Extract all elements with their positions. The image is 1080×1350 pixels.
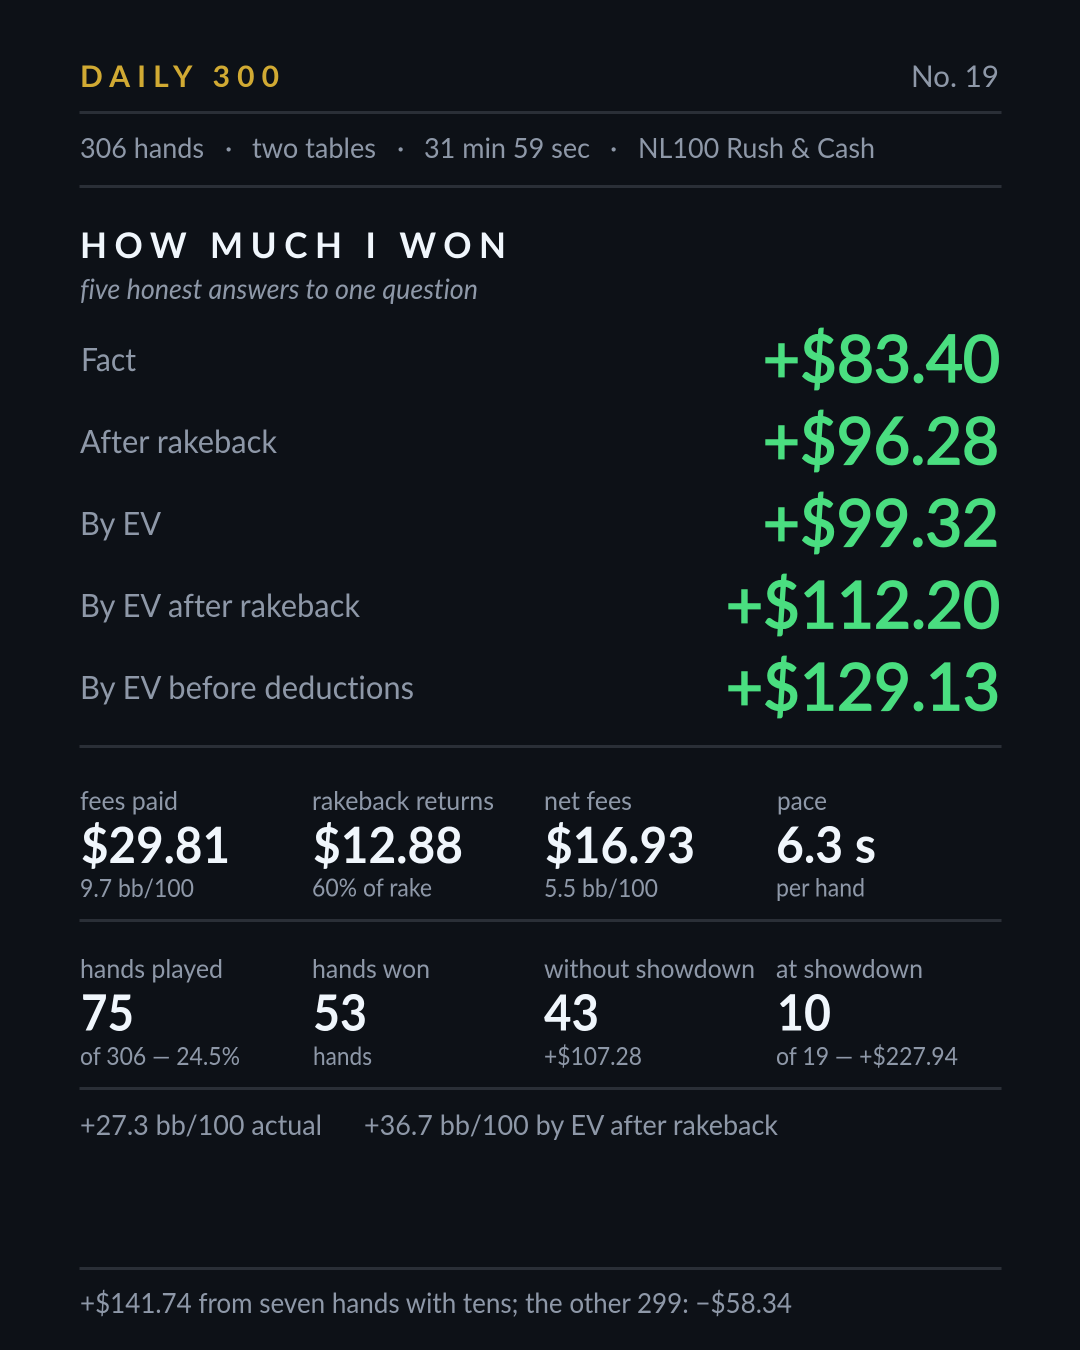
stat: hands won: 53 [313,982,367,1042]
header [80,58,999,94]
results list [80,318,1000,724]
stat: at showdown [776,952,958,1071]
result: by EV [80,482,999,560]
win rate line: +36.7 bb/100 by EV after rakeback [364,1107,779,1141]
stat: fees paid: $29.81 [81,814,230,874]
stat: hands played: of 306 — 24.5% [80,1041,240,1071]
stat: rakeback returns: rakeback returns [312,784,494,816]
stat: pace: per hand [776,872,865,902]
stat: fees paid: fees paid [80,784,178,816]
result: by EV before deductions: By EV before deductions [80,667,414,706]
result: fact [81,318,1000,396]
stat: at showdown: 10 [777,982,831,1042]
stat: fees paid: 9.7 bb/100 [80,873,194,903]
stat: at showdown: of 19 — +$227.94 [776,1041,958,1071]
result: by EV: +$99.32 [763,482,999,560]
series title: DAILY 300 [80,58,279,94]
session meta line: · [397,130,404,164]
stat: net fees: $16.93 [545,814,695,874]
session meta line: two tables [252,130,376,164]
session meta line: NL100 Rush & Cash [638,130,875,164]
stat: pace [776,784,876,902]
result: after rakeback: After rakeback [80,421,278,460]
stat: rakeback returns: 60% of rake [312,872,432,902]
stat: without showdown [544,952,755,1071]
stat: hands won: hands won [312,952,430,984]
stat: net fees: net fees [544,784,632,816]
result: after rakeback [80,400,999,478]
session meta line: · [610,130,617,164]
stat: rakeback returns: $12.88 [313,814,463,874]
stat: hands played: 75 [81,982,134,1042]
result: by EV: By EV [80,503,161,542]
result: by EV after rakeback [80,564,1000,642]
stat: without showdown: without showdown [544,952,755,984]
stat: at showdown: at showdown [776,952,923,984]
win rate line [80,1107,779,1141]
stat: hands played [80,952,240,1071]
issue number: No. 19 [911,58,999,94]
stat: rakeback returns [312,784,494,902]
stat: hands won: hands [313,1041,372,1071]
stat: without showdown: 43 [544,982,599,1042]
result: by EV after rakeback: +$112.20 [726,564,1000,642]
stats row: hands [80,952,958,1071]
stat: hands won [312,952,430,1071]
section heading [80,224,506,305]
section subtitle: five honest answers to one question [80,271,478,305]
stat: hands played: hands played [80,952,223,984]
win rate line: +27.3 bb/100 actual [80,1107,322,1141]
stats row: fees [80,784,876,903]
result: by EV before deductions [80,646,1000,724]
result: by EV before deductions: +$129.13 [726,646,1000,724]
result: after rakeback: +$96.28 [763,400,999,478]
stat: without showdown: +$107.28 [544,1041,642,1071]
session meta line: · [225,130,232,164]
stat: pace: pace [777,784,827,816]
result: by EV after rakeback: By EV after rakeback [80,585,361,624]
result: fact: Fact [81,339,136,378]
session meta line [80,130,875,164]
session meta line: 306 hands [80,130,204,164]
footer note: +$141.74 from seven hands with tens; the other 299: −$58.34 [80,1285,792,1319]
section heading: HOW MUCH I WON [80,224,506,266]
stat: pace: 6.3 s [776,814,876,874]
session meta line: 31 min 59 sec [424,130,590,164]
result: fact: +$83.40 [763,318,1000,396]
stat: net fees [544,784,695,903]
stat: net fees: 5.5 bb/100 [544,873,658,903]
stat: fees paid [80,784,230,903]
